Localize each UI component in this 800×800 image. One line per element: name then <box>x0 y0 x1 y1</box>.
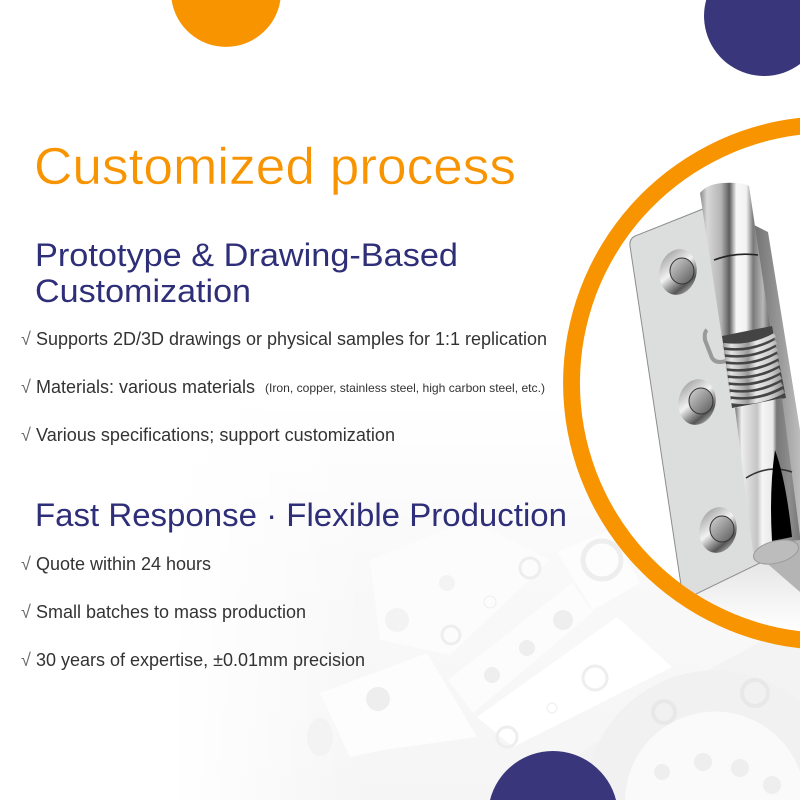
list item: batches: √ <box>21 602 31 622</box>
list item: drawings: Supports 2D/3D drawings or physical samples for 1:1 replication <box>36 329 547 349</box>
section 2 heading: Fast Response · Flexible Production <box>35 497 567 533</box>
spring wire hook <box>705 330 726 362</box>
product photo backdrop: white disc <box>580 135 800 631</box>
section 1 list <box>21 329 547 445</box>
hinge floor shadow <box>696 564 800 630</box>
decorative circle: top orange <box>172 0 280 47</box>
list item: materials: (Iron, copper, stainless steel, high carbon steel, etc.) <box>265 381 545 395</box>
list item: specifications: √ <box>21 425 31 445</box>
spring coils <box>722 326 786 408</box>
decorative circle: bottom navy <box>490 751 616 800</box>
list item: specifications: Various specifications; support customization <box>36 425 395 445</box>
product photo ring: orange circle frame <box>563 118 800 648</box>
product image: steel spring hinge <box>630 183 800 630</box>
list item: batches: Small batches to mass production <box>36 602 306 622</box>
section 1 heading <box>35 237 458 309</box>
list item: drawings: √ <box>21 329 31 349</box>
title: Customized process <box>34 138 516 196</box>
list item: expertise: 30 years of expertise, ±0.01mm precision <box>36 650 365 670</box>
hinge right leaf <box>754 225 800 536</box>
list item: materials: √ <box>21 377 31 397</box>
list item: quote: Quote within 24 hours <box>36 554 211 574</box>
background: faint machinery photo <box>170 400 800 800</box>
screw hole 3 <box>700 507 737 553</box>
barrel black reflection <box>771 450 792 541</box>
screw hole 1 <box>660 249 697 295</box>
list item: quote: √ <box>21 554 31 574</box>
hinge left leaf <box>630 209 762 596</box>
lower barrel <box>735 398 800 552</box>
upper barrel <box>700 183 770 338</box>
section 2 list <box>21 554 365 670</box>
list item: materials <box>21 377 545 397</box>
list item: materials: Materials: various materials <box>36 377 255 397</box>
section 1 heading: Customization <box>35 273 251 309</box>
section 1 heading: Prototype & Drawing-Based <box>35 237 458 273</box>
screw hole 2 <box>678 379 716 425</box>
barrel end cap <box>753 540 800 592</box>
decorative circle: top-right navy <box>704 0 800 76</box>
list item: expertise: √ <box>21 650 31 670</box>
